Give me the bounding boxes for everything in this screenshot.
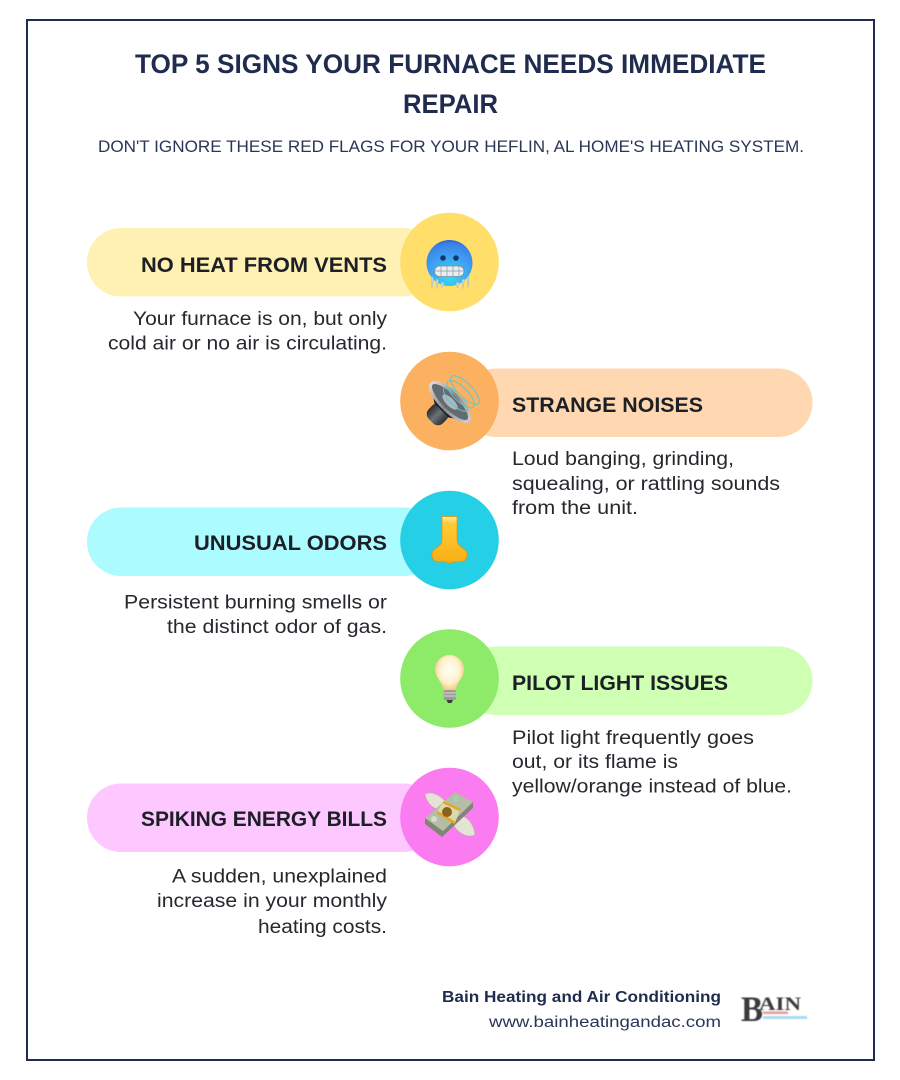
logo: Bain: B [741, 989, 763, 1029]
heading: no heat: NO HEAT FROM VENTS [141, 254, 387, 277]
description: pilot light: yellow/orange instead of blue. [512, 776, 792, 798]
icon: loudspeaker [412, 365, 487, 440]
description: noises: Loud banging, grinding, [512, 449, 734, 470]
title: REPAIR [403, 89, 498, 119]
footer: company name and website: www.bainheatingandac.com [488, 1014, 721, 1031]
heading pill: no heat [87, 228, 437, 296]
icon circle: pilot light [400, 629, 499, 728]
description: energy bills: increase in your monthly [157, 891, 388, 912]
icon circle: noises [400, 352, 499, 450]
description: no heat: Your furnace is on, but only [133, 309, 388, 330]
description: pilot light: out, or its flame is [512, 752, 678, 773]
heading: noises: STRANGE NOISES [512, 394, 703, 417]
heading pill: pilot light [462, 646, 812, 715]
description: energy bills [157, 866, 388, 938]
panel: spiking energy bills [87, 768, 499, 938]
description: no heat: cold air or no air is circulating. [108, 334, 387, 354]
icon: freezing face [426, 240, 472, 289]
description: odors: the distinct odor of gas. [167, 617, 387, 638]
panel: pilot light issues [400, 629, 812, 798]
icon circle: energy bills [400, 768, 499, 866]
footer: company name and website [442, 989, 721, 1031]
heading pill: odors [87, 508, 437, 576]
icon circle: no heat [400, 213, 499, 311]
description: noises: from the unit. [512, 498, 638, 519]
description: pilot light: Pilot light frequently goes [512, 728, 754, 749]
heading: energy bills: SPIKING ENERGY BILLS [141, 808, 387, 831]
icon: light bulb [435, 655, 464, 703]
description: noises [512, 449, 780, 519]
panel: unusual odors [87, 491, 499, 638]
heading pill: energy bills [87, 784, 437, 852]
panel: no heat from vents [87, 213, 499, 354]
description: pilot light [512, 728, 792, 798]
title: TOP 5 SIGNS YOUR FURNACE NEEDS IMMEDIATE [135, 49, 766, 79]
footer: company name and website: Bain Heating and Air Conditioning [442, 989, 721, 1006]
title [135, 49, 766, 119]
logo: Bain: AIN [759, 994, 801, 1015]
description: odors: Persistent burning smells or [124, 592, 388, 614]
description: energy bills: A sudden, unexplained [172, 866, 387, 888]
subtitle: DON'T IGNORE THESE RED FLAGS FOR YOUR HEFLIN, AL HOME'S HEATING SYSTEM. [98, 138, 804, 156]
icon circle: odors [400, 491, 499, 589]
description: no heat [108, 309, 388, 354]
heading pill: noises [462, 368, 812, 437]
description: odors [124, 592, 388, 638]
logo: Bain [741, 989, 807, 1029]
panel: strange noises [400, 352, 812, 519]
icon: nose [432, 516, 467, 563]
heading: odors: UNUSUAL ODORS [194, 532, 387, 555]
description: energy bills: heating costs. [258, 917, 387, 938]
icon: money with wings [425, 792, 475, 837]
description: noises: squealing, or rattling sounds [512, 474, 780, 495]
heading: pilot light: PILOT LIGHT ISSUES [512, 672, 728, 695]
